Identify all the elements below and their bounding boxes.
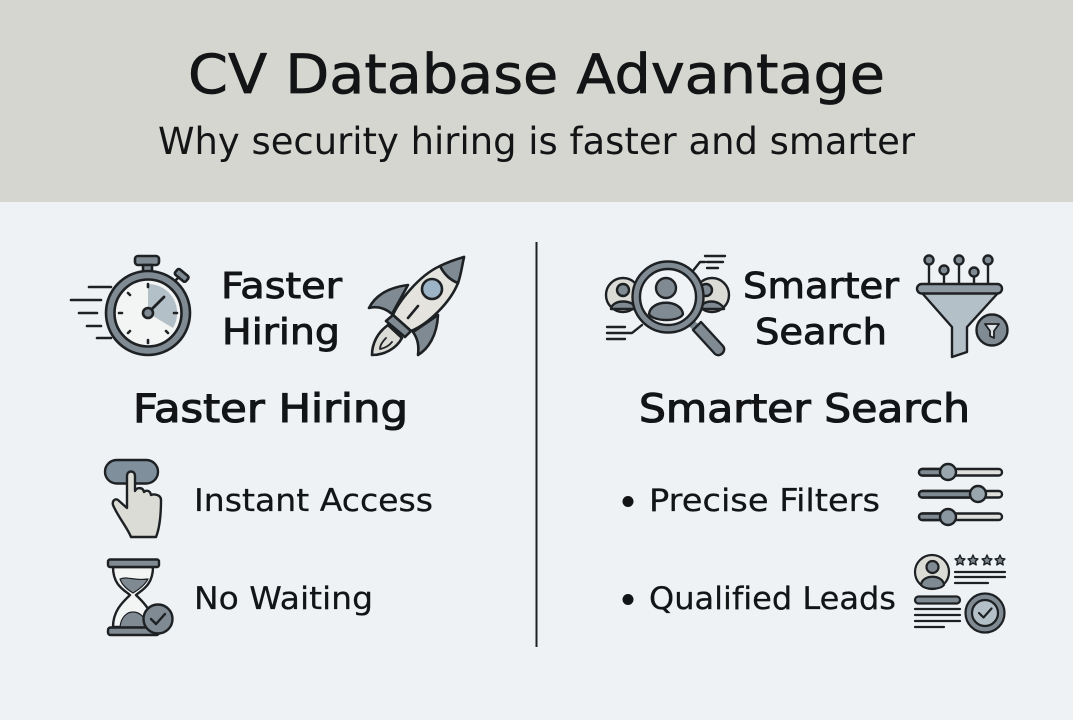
text: no waiting: No Waiting — [194, 581, 373, 617]
icon: candidate profile with rating badge — [915, 555, 1005, 632]
icon heading: faster hiring — [221, 266, 342, 353]
icon: hourglass with check — [108, 560, 172, 635]
icon: stopwatch — [71, 256, 190, 355]
icon heading: smarter search — [743, 266, 899, 353]
text: qualified leads: Qualified Leads — [649, 581, 896, 617]
icon: magnifier over candidates — [606, 256, 729, 355]
subtitle: Why security hiring is faster and smarter — [158, 120, 916, 163]
icon: rocket — [369, 257, 464, 355]
text: precise filters: Precise Filters — [649, 483, 880, 519]
icon: filter sliders — [919, 464, 1002, 525]
header band — [0, 0, 1073, 202]
icon: pressing finger — [105, 460, 161, 537]
text: instant access: Instant Access — [194, 483, 433, 519]
icon heading: faster hiring: Faster — [221, 266, 342, 307]
subheading: smarter search: Smarter Search — [639, 387, 970, 432]
icon heading: faster hiring: Hiring — [222, 312, 340, 353]
icon heading: smarter search: Smarter — [743, 266, 899, 307]
icon heading: smarter search: Search — [755, 312, 887, 353]
panel: faster hiring — [71, 256, 464, 635]
center divider — [536, 242, 538, 647]
icon: funnel with nodes — [917, 256, 1008, 357]
subheading: faster hiring: Faster Hiring — [133, 387, 408, 432]
panel: smarter search — [606, 256, 1008, 632]
title: CV Database Advantage — [188, 43, 885, 106]
